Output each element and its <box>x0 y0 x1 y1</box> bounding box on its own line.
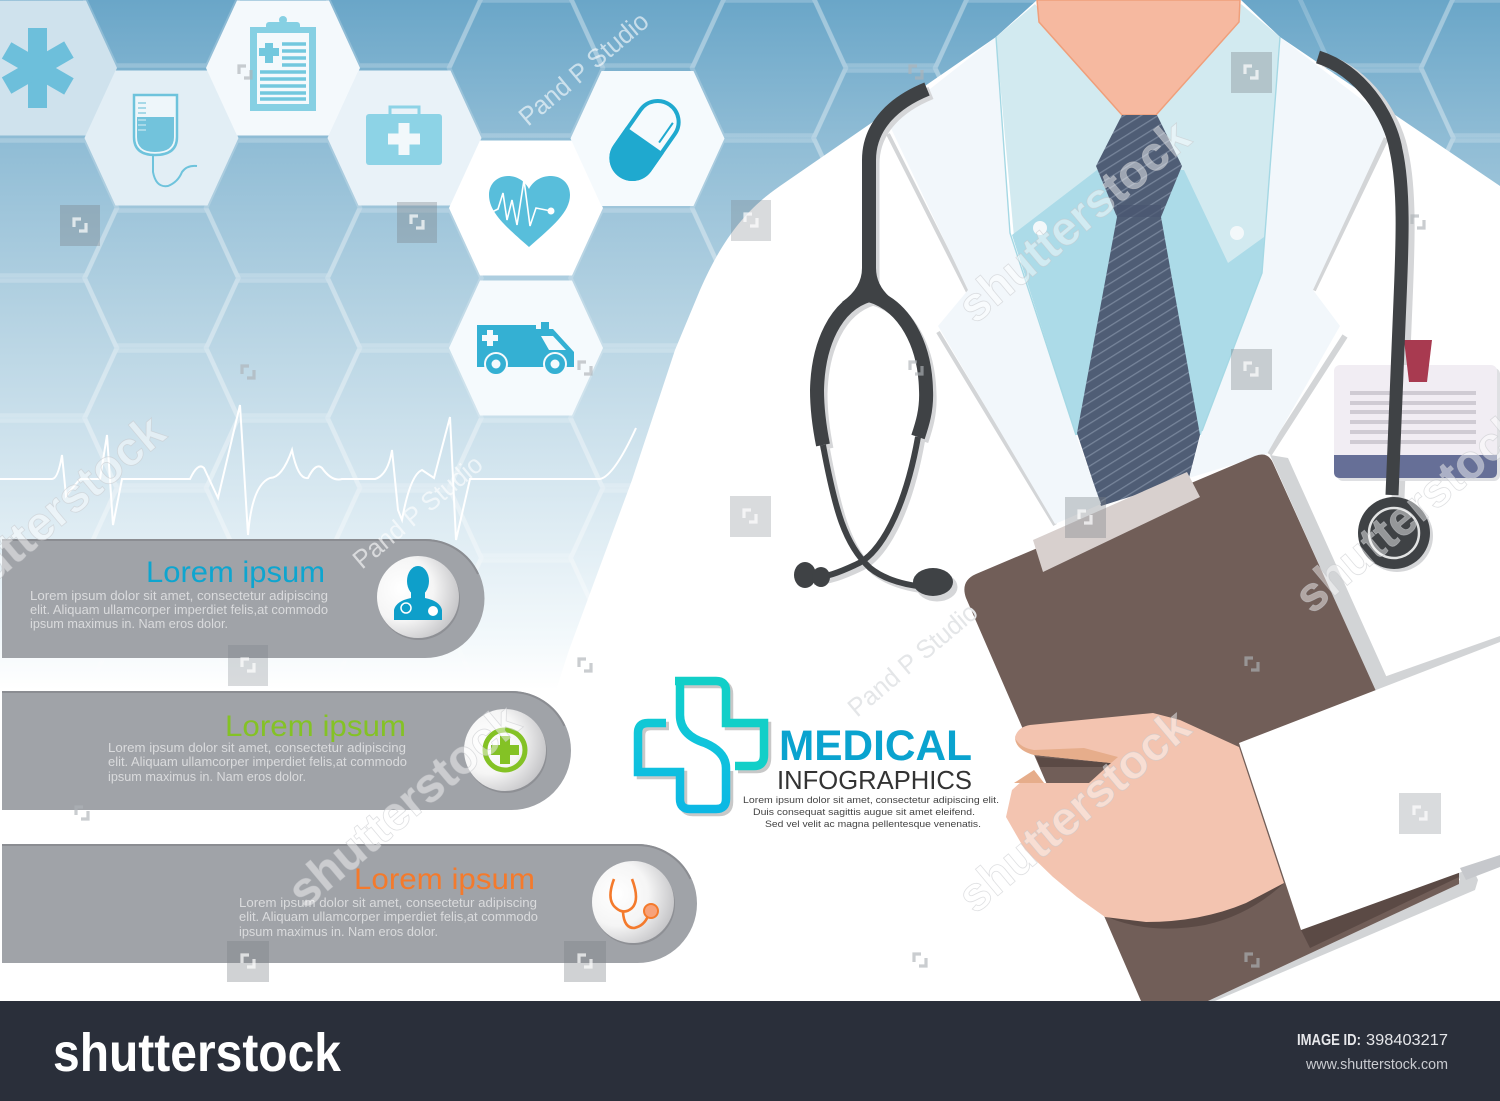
text block: logo description <box>743 795 999 830</box>
text block: bar 3: Lorem ipsum dolor sit amet, consectetur adipiscing <box>239 896 537 910</box>
text block: bar 2: Lorem ipsum dolor sit amet, consectetur adipiscing <box>108 741 406 755</box>
icon: first aid kit hexagon <box>328 70 482 206</box>
panel: bar 3 <box>2 844 697 963</box>
coat lapels <box>888 37 1391 525</box>
heading: bar 2: Lorem ipsum <box>225 710 406 743</box>
icon: orange stethoscope <box>592 861 675 945</box>
icon: green cross <box>464 709 547 793</box>
text block: bar 1: Lorem ipsum dolor sit amet, consectetur adipiscing <box>30 589 328 603</box>
tie <box>1077 115 1200 506</box>
text block: bar 2: elit. Aliquam ullamcorper imperdiet felis,at commodo <box>108 755 407 769</box>
watermarks: Pand P Studio <box>347 449 488 575</box>
text block: bar 1 <box>30 589 328 631</box>
icon: IV drip hexagon <box>84 70 238 206</box>
image id: 398403217 <box>1366 1032 1448 1049</box>
image id: IMAGE ID: <box>1297 1032 1361 1049</box>
icon: doctor <box>377 556 460 640</box>
image id <box>1297 1032 1448 1049</box>
watermarks: Pand P Studio <box>513 6 654 132</box>
text block: bar 2: ipsum maximus in. Nam eros dolor. <box>108 770 306 784</box>
shirt <box>996 4 1280 435</box>
text block: bar 3 <box>239 896 538 939</box>
heartbeat line <box>0 405 636 540</box>
footer bar <box>0 1001 1500 1101</box>
stethoscope <box>794 57 1433 601</box>
watermarks: shutterstock <box>278 694 531 918</box>
text block: bar 1: ipsum maximus in. Nam eros dolor. <box>30 617 228 631</box>
icon: ambulance hexagon <box>449 280 603 416</box>
ID badge <box>1324 60 1500 498</box>
watermarks: Pand P Studio <box>842 597 983 723</box>
icon: capsule hexagon <box>570 71 724 206</box>
panel: bar 2 <box>2 691 571 810</box>
heading: bar 1: Lorem ipsum <box>146 556 325 589</box>
title: medical infographics: MEDICAL <box>779 722 972 770</box>
text block: logo description: Lorem ipsum dolor sit amet, consectetur adipiscing elit. <box>743 795 999 806</box>
logo: medical cross <box>638 681 767 812</box>
website: www.shutterstock.com <box>1305 1057 1448 1073</box>
watermarks: shutterstock <box>948 699 1201 923</box>
title: medical infographics <box>777 722 972 795</box>
doctor coat <box>540 0 1500 1001</box>
icon: clipboard hexagon <box>206 0 360 136</box>
hand <box>1006 713 1284 929</box>
heading: bar 3: Lorem ipsum <box>354 863 535 896</box>
footer logo: shutterstock <box>53 1023 342 1083</box>
text block: bar 3: elit. Aliquam ullamcorper imperdiet felis,at commodo <box>239 910 538 924</box>
title: medical infographics: INFOGRAPHICS <box>777 765 972 795</box>
neck <box>1037 0 1240 115</box>
watermarks: shutterstock <box>948 109 1201 333</box>
icon: heart with ECG hexagon <box>449 140 603 276</box>
text block: logo description: Sed vel velit ac magna pellentesque venenatis. <box>765 819 981 830</box>
text block: bar 2 <box>108 741 407 784</box>
text block: bar 1: elit. Aliquam ullamcorper imperdiet felis,at commodo <box>30 603 328 617</box>
panel: bar 1 <box>2 539 485 658</box>
text block: bar 3: ipsum maximus in. Nam eros dolor. <box>239 925 438 939</box>
clipboard <box>964 455 1478 1001</box>
icon: star of life hexagon <box>0 0 117 136</box>
text block: logo description: Duis consequat sagittis augue sit amet eleifend. <box>753 807 975 818</box>
sleeve <box>1239 636 1500 948</box>
